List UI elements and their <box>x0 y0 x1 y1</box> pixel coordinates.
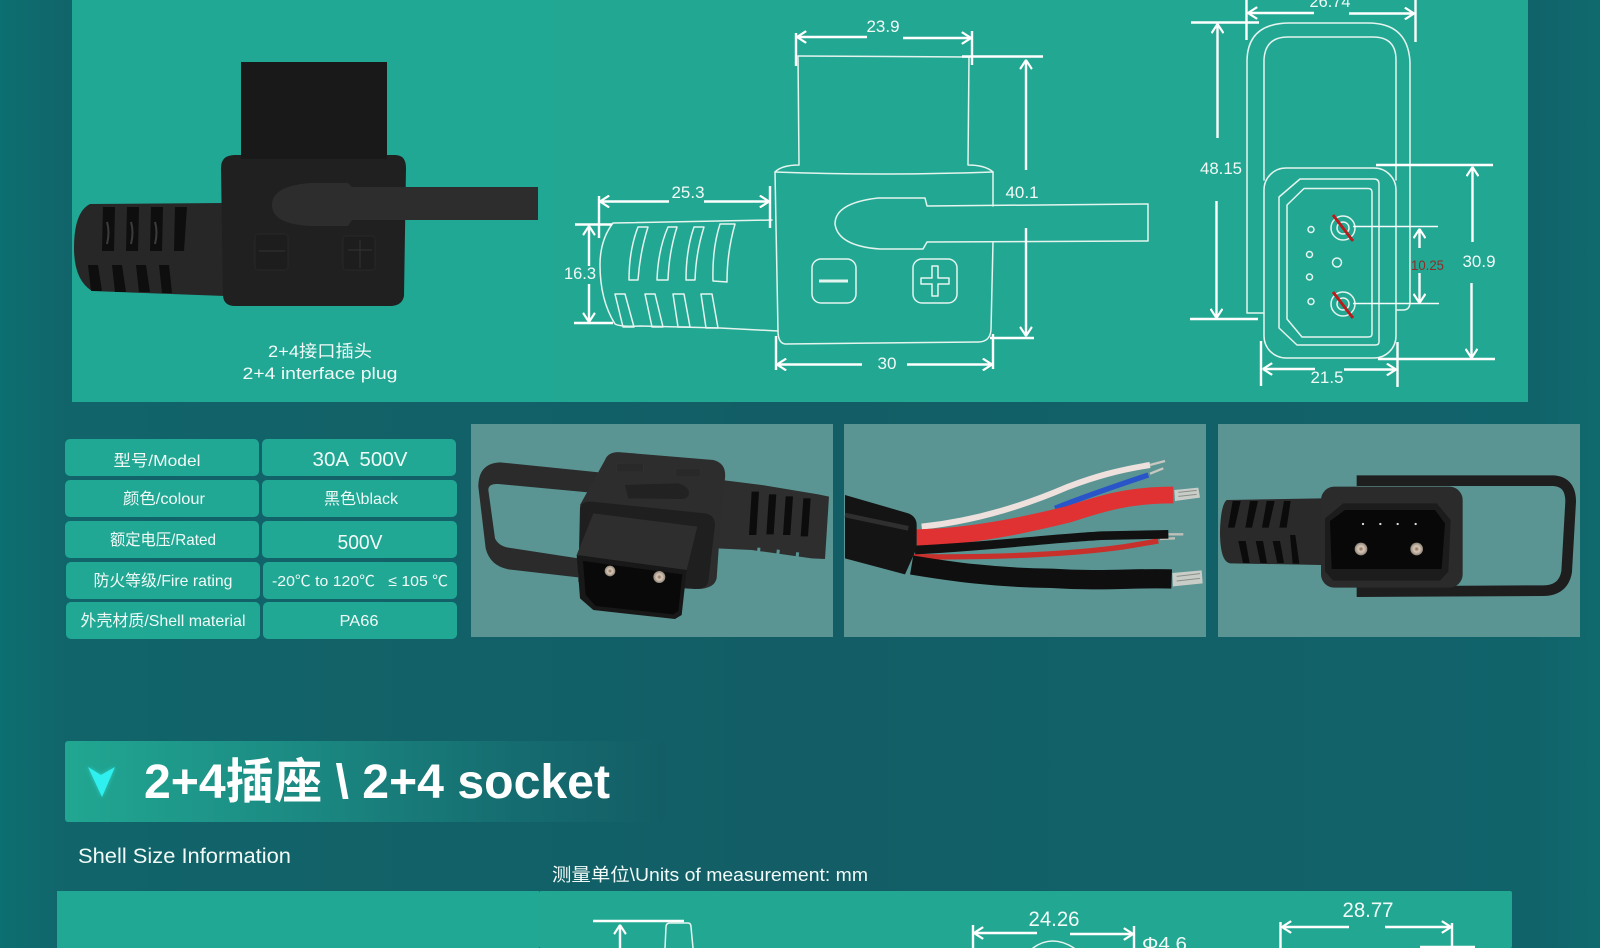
dimension: 40.1 <box>962 56 1043 338</box>
table: plug specifications <box>65 439 457 639</box>
row: fire rating: 防火等级/Fire rating <box>94 572 232 590</box>
panel: socket photo background <box>57 891 539 948</box>
row: model: 30A 500V <box>312 449 408 471</box>
dimension: 40.1: 40.1 <box>1006 183 1038 202</box>
dimension: 30.9 <box>1376 165 1496 359</box>
text: units of measurement: 测量单位\Units of measurement: mm <box>552 865 868 885</box>
text: shell size information: Shell Size Information <box>78 845 291 868</box>
dimension: 48.15: 48.15 <box>1200 159 1242 178</box>
row: shell material: 外壳材质/Shell material <box>80 612 246 630</box>
photo: plug rear view with contacts <box>1218 424 1580 637</box>
dimension: 24.26: 24.26 <box>1028 908 1080 931</box>
dimension: 28.77: 28.77 <box>1342 899 1394 922</box>
dimension: 30.9: 30.9 <box>1462 252 1496 271</box>
drawing: plug side outline with dimensions <box>564 17 1148 373</box>
icon: cyan down arrow <box>88 767 115 797</box>
photo: plug front three-quarter view <box>471 424 833 637</box>
dimension: 25.3: 25.3 <box>672 183 704 202</box>
dimension: 16.3: 16.3 <box>564 264 596 283</box>
dimension: 21.5 <box>1261 341 1398 387</box>
row: rated voltage: 额定电压/Rated <box>110 531 216 549</box>
drawing: socket height dimension <box>593 921 693 948</box>
section heading: 2+4 socket: 2+4插座 \ 2+4 socket <box>144 756 610 809</box>
caption: plug name <box>242 342 398 383</box>
caption: plug name: 2+4接口插头 <box>268 342 372 361</box>
row: fire rating <box>66 562 457 599</box>
row: colour: 颜色/colour <box>123 490 206 508</box>
caption: plug name: 2+4 interface plug <box>242 364 398 383</box>
panel: socket dimension drawings <box>539 891 1512 948</box>
row: colour <box>65 480 457 517</box>
section heading: 2+4 socket <box>65 741 665 822</box>
dimension: 23.9 <box>796 17 972 66</box>
drawing: plug front outline with dimensions <box>1190 0 1496 387</box>
panel: plug photo and caption <box>72 0 555 402</box>
dimension: 26.74 <box>1246 0 1416 42</box>
row: rated voltage: 500V <box>338 532 383 554</box>
dimension: 23.9: 23.9 <box>866 17 900 36</box>
row: model <box>65 439 456 476</box>
dimension: 28.77 <box>1280 899 1475 948</box>
row: rated voltage <box>65 521 457 558</box>
dimension: 30 <box>776 334 993 373</box>
dimension: 24.26 <box>973 908 1134 948</box>
dimension: 25.3 <box>599 183 770 238</box>
row: shell material <box>66 602 457 639</box>
dimension: 30: 30 <box>878 354 896 373</box>
icon: plug side view <box>74 62 538 306</box>
dimension: 10.25 <box>1411 229 1444 303</box>
row: model: 型号/Model <box>114 452 200 470</box>
row: fire rating: -20℃ to 120℃ ≤ 105 ℃ <box>272 573 448 590</box>
row: shell material: PA66 <box>340 613 379 630</box>
dimension: 48.15 <box>1190 22 1259 319</box>
dimension: 10.25: 10.25 <box>1411 257 1444 273</box>
photo: stripped cable wires <box>844 424 1206 637</box>
dimension: 21.5: 21.5 <box>1310 368 1344 387</box>
dimension: 16.3 <box>564 224 613 323</box>
panel: plug dimension drawings <box>555 0 1528 402</box>
row: colour: 黑色\black <box>324 490 399 508</box>
